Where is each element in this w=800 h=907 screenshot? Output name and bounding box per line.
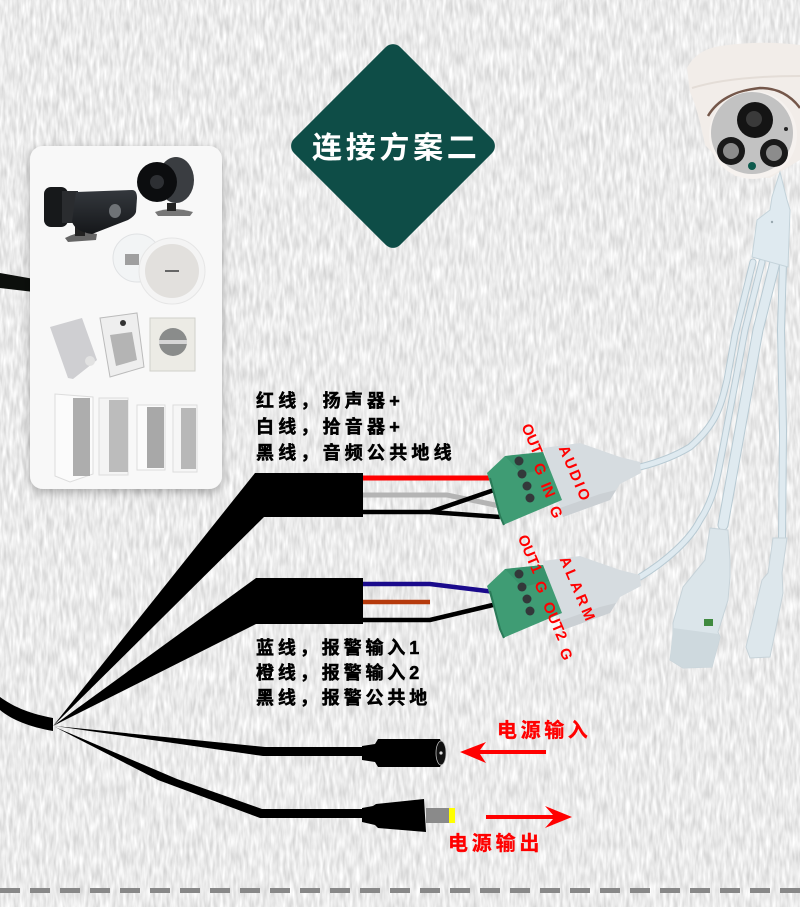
text: audio wire legend bbox=[256, 390, 456, 463]
connector labels: alarm bbox=[514, 532, 599, 663]
connector labels: audio: G bbox=[529, 461, 550, 478]
arrow: power input bbox=[460, 742, 546, 763]
connector labels: audio: AUDIO bbox=[555, 443, 594, 506]
connector labels: audio: OUT bbox=[518, 421, 546, 457]
connector labels: alarm: OUT1 bbox=[514, 532, 545, 576]
text: audio wire legend: 黑线，音频公共地线 bbox=[256, 442, 456, 463]
connector labels: alarm: G bbox=[555, 646, 576, 663]
connector labels: alarm: G bbox=[530, 579, 551, 596]
black cable fan-out bbox=[0, 473, 380, 818]
text: audio wire legend: 红线，扬声器+ bbox=[256, 390, 404, 411]
icon: ceiling speaker bbox=[113, 234, 205, 304]
label: power input: 电源输入 bbox=[497, 719, 591, 742]
text: audio wire legend: 白线，拾音器+ bbox=[256, 416, 404, 437]
icon: wall speakers bbox=[50, 313, 195, 379]
connector labels: alarm: ALARM bbox=[556, 554, 599, 626]
colored wires bbox=[363, 478, 500, 620]
icon: DC plug bbox=[746, 538, 787, 658]
heading diamond bbox=[287, 40, 499, 252]
title: 连接方案二 bbox=[312, 132, 480, 165]
icon: DC female jack bbox=[362, 739, 446, 767]
icon: cable splitter bbox=[752, 172, 790, 267]
camera cable branches bbox=[640, 262, 783, 577]
arrow: power output bbox=[486, 806, 572, 828]
connector: audio bbox=[487, 421, 641, 525]
connector: alarm bbox=[487, 532, 641, 663]
connector labels: audio bbox=[518, 421, 594, 521]
icon: network plug bbox=[670, 528, 730, 668]
text: alarm wire legend: 黑线，报警公共地 bbox=[256, 688, 431, 708]
short black cable behind speaker card bbox=[0, 273, 34, 292]
icon: DC male plug bbox=[362, 799, 455, 832]
text: alarm wire legend bbox=[256, 637, 431, 708]
icon: column speakers bbox=[55, 394, 197, 482]
text: alarm wire legend: 蓝线，报警输入1 bbox=[256, 637, 423, 658]
icon: horn speaker bbox=[44, 187, 137, 242]
icon: round horn speaker bbox=[137, 157, 194, 216]
connector labels: alarm: OUT2 bbox=[539, 599, 570, 643]
bottom dashed divider bbox=[0, 888, 800, 893]
text: alarm wire legend: 橙线，报警输入2 bbox=[256, 662, 423, 683]
panel: speakers card bbox=[30, 146, 222, 489]
label: power output: 电源输出 bbox=[448, 832, 543, 855]
icon: dome camera bbox=[687, 43, 800, 179]
connector labels: audio: IN bbox=[537, 480, 558, 500]
connector labels: audio: G bbox=[545, 504, 566, 521]
